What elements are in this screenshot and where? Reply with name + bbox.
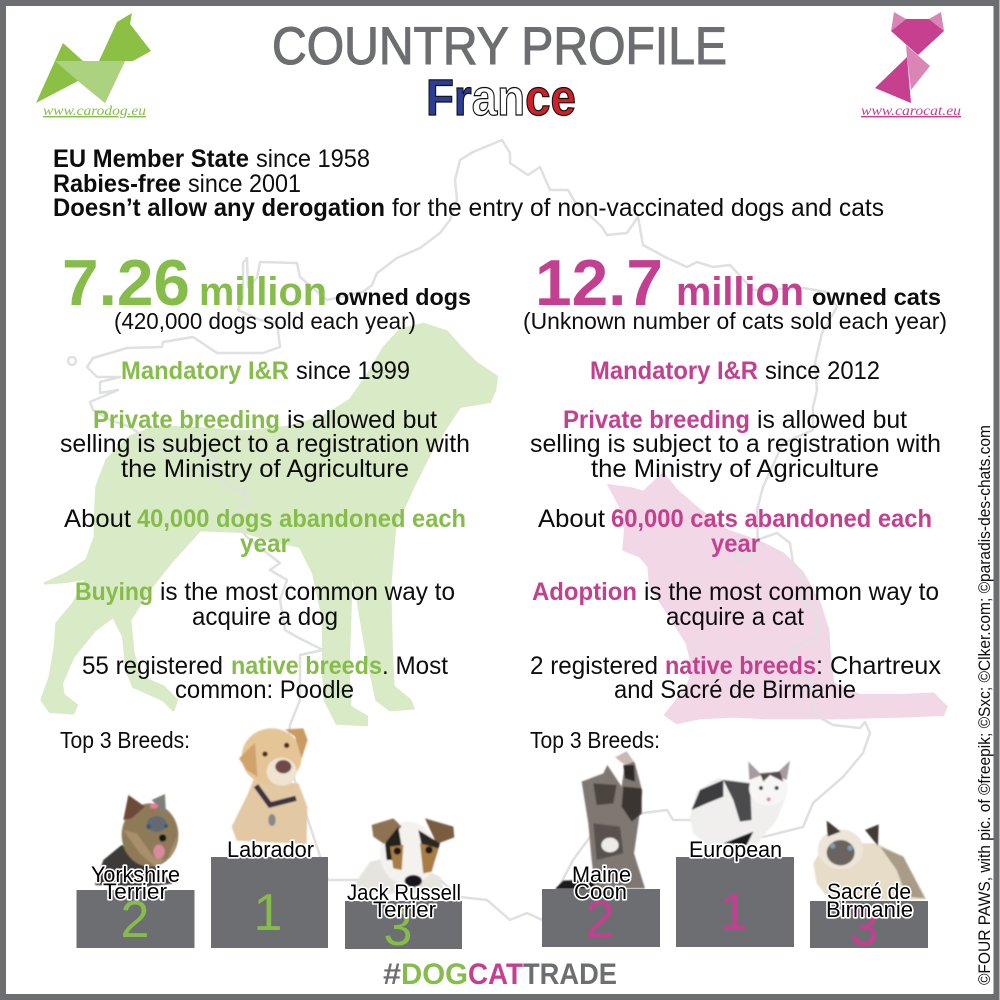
photo: jack russell terrier (355, 818, 454, 893)
photo: yorkshire terrier (95, 794, 178, 887)
cat private breeding: the Ministry of Agriculture (591, 455, 879, 483)
dog private breeding: selling is subject to a registration with (60, 430, 470, 458)
country facts: Doesn’t allow any derogation (53, 194, 385, 222)
label: maine coon: Maine (572, 862, 631, 887)
country facts: EU Member State (53, 145, 249, 173)
rank 2: 2 (121, 891, 149, 949)
podium block 1 (211, 857, 328, 948)
cat native breeds: and Sacré de Birmanie (614, 676, 856, 704)
cat private breeding (530, 406, 941, 483)
cat private breeding: selling is subject to a registration with (530, 430, 941, 458)
country name: France (426, 69, 576, 126)
cat private breeding: Private breeding (563, 406, 750, 434)
rank 1: 1 (254, 884, 282, 942)
cat abandonment: year (711, 530, 760, 558)
label: labrador: Labrador (227, 837, 314, 862)
cat headline stat (523, 246, 947, 334)
label: jack russell terrier (347, 880, 461, 922)
logo: carodog: www.carodog.eu (43, 104, 146, 119)
hashtag footer: TRADE (523, 958, 617, 991)
dog private breeding: is allowed but (287, 406, 437, 434)
podium block 3 (345, 901, 462, 949)
cat acquisition: is the most common way to (644, 578, 939, 606)
dog abandonment (64, 505, 466, 558)
dog headline stat: million (199, 270, 327, 314)
cat acquisition: acquire a cat (666, 603, 804, 631)
dog private breeding: the Ministry of Agriculture (121, 455, 409, 483)
photo: sacre de birmanie cat (813, 821, 927, 901)
rank 3: 3 (384, 899, 412, 957)
label: maine coon (572, 862, 631, 904)
label: yorkshire terrier: Yorkshire (91, 862, 180, 887)
hashtag footer: CAT (468, 958, 523, 991)
cat headline stat: million (676, 270, 804, 314)
dog headline stat: owned dogs (335, 284, 471, 310)
dog acquisition: is the most common way to (160, 578, 455, 606)
dog identification and registration: since 1999 (296, 357, 410, 385)
cat acquisition (532, 578, 939, 631)
cat native breeds: : Chartreux (816, 652, 941, 680)
dog headline stat: (420,000 dogs sold each year) (114, 308, 416, 334)
label: sacre de birmanie: Sacré de (827, 879, 911, 904)
dog abandonment: About (64, 505, 131, 533)
cat private breeding: is allowed but (757, 406, 907, 434)
country facts: Rabies-free (53, 170, 181, 198)
label: jack russell terrier: Jack Russell (347, 880, 461, 905)
title: COUNTRY PROFILE (272, 17, 727, 76)
photo: european cat (690, 761, 790, 845)
country facts: since 1958 (256, 145, 370, 173)
logo: carodog (36, 13, 151, 119)
dog native breeds: 55 registered (82, 652, 223, 680)
rank 3: 3 (850, 899, 878, 957)
podium block 3 (810, 901, 928, 948)
cat silhouette (608, 473, 947, 723)
dog private breeding (60, 406, 470, 483)
cat identification and registration: since 2012 (765, 357, 880, 385)
dog acquisition: Buying (75, 578, 153, 606)
cat native breeds (530, 652, 941, 704)
podium: dog breeds (76, 837, 462, 957)
label: jack russell terrier: Terrier (373, 897, 436, 922)
logo: carocat: www.carocat.eu (861, 104, 961, 119)
cat native breeds: native breeds (665, 652, 816, 680)
cat abandonment (538, 505, 932, 558)
cat identification and registration: Mandatory I&R (590, 357, 758, 385)
label: yorkshire terrier (91, 862, 180, 904)
map outline of France (68, 140, 870, 920)
photo: labrador (232, 728, 308, 844)
country facts: since 2001 (188, 170, 301, 198)
cat headline stat: (Unknown number of cats sold each year) (523, 308, 947, 334)
cat native breeds: 2 registered (530, 652, 658, 680)
dog headline stat: 7.26 (62, 246, 190, 319)
label: european: European (689, 837, 782, 862)
dog abandonment: 40,000 dogs abandoned each (137, 505, 466, 533)
dog identification and registration (121, 357, 410, 385)
dog acquisition (75, 578, 455, 631)
label: maine coon: Coon (574, 879, 627, 904)
hashtag footer (383, 958, 617, 991)
country facts: for the entry of non-vaccinated dogs and cats (392, 194, 884, 222)
podium: cat breeds (542, 837, 928, 957)
dog headline stat (62, 246, 471, 334)
cat acquisition: Adoption (532, 578, 637, 606)
podium block 2 (542, 889, 660, 947)
hashtag footer: DOG (401, 958, 468, 991)
photo: maine coon (555, 752, 645, 889)
photo credits: ©FOUR PAWS, with pic. of ©freepik; ©Sxc; ©Clker.com; ©paradis-des-chats.com (975, 425, 994, 985)
dog private breeding: Private breeding (93, 406, 280, 434)
podium block 1 (676, 857, 794, 947)
podium block 2 (76, 890, 194, 948)
logo: carocat (861, 12, 961, 119)
dog abandonment: year (240, 530, 290, 558)
cat top 3 heading: Top 3 Breeds: (530, 727, 660, 753)
dog top 3 heading: Top 3 Breeds: (60, 727, 190, 753)
dog silhouette (42, 324, 497, 725)
label: yorkshire terrier: Terrier (103, 879, 167, 904)
dog native breeds: common: Poodle (175, 676, 354, 704)
country facts (53, 145, 884, 222)
cat headline stat: owned cats (812, 284, 941, 310)
dog identification and registration: Mandatory I&R (121, 357, 289, 385)
cat abandonment: 60,000 cats abandoned each (611, 505, 932, 533)
rank 1: 1 (720, 884, 748, 942)
cat headline stat: 12.7 (535, 246, 663, 319)
panel: dogs (60, 246, 471, 753)
hashtag footer: # (383, 958, 401, 991)
dog native breeds: native breeds (231, 652, 382, 680)
rank 2: 2 (586, 891, 614, 949)
label: sacre de birmanie: Birmanie (826, 897, 913, 922)
dog acquisition: acquire a dog (192, 603, 338, 631)
dog native breeds (82, 652, 448, 704)
dog native breeds: . Most (382, 652, 448, 680)
label: sacre de birmanie (826, 879, 913, 922)
cat identification and registration (590, 357, 880, 385)
cat abandonment: About (538, 505, 605, 533)
panel: cats (523, 246, 947, 753)
